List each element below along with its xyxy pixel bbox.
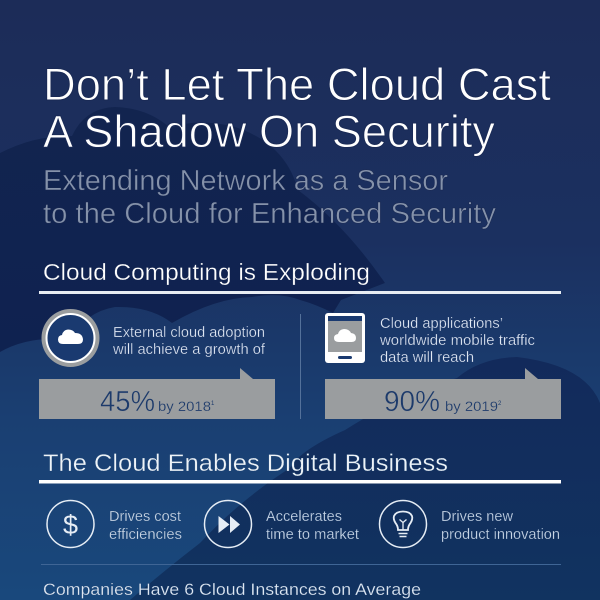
icon: fast forward — [204, 500, 252, 548]
subtitle: Extending Network as a Sensor — [43, 165, 449, 197]
benefit: cost — [47, 500, 182, 548]
cost text: efficiencies — [109, 527, 182, 543]
section rule — [39, 480, 561, 484]
icon: light bulb — [380, 500, 426, 548]
callout: 90%: 90% — [384, 386, 440, 418]
cost text: Drives cost — [109, 509, 181, 525]
time text: time to market — [266, 527, 359, 543]
traffic text: worldwide mobile traffic — [379, 333, 535, 349]
time text — [266, 509, 359, 543]
background cloud: bottom right — [130, 357, 600, 600]
background cloud: dark upper — [0, 107, 385, 352]
title: A Shadow On Security — [43, 106, 495, 157]
callout: 45%: by 2018 — [158, 398, 211, 414]
icon: tablet with cloud — [325, 313, 365, 363]
callout: 90%: by 2019 — [445, 398, 498, 414]
divider — [300, 314, 301, 419]
innovation text — [441, 509, 560, 543]
section heading: instances: Companies Have 6 Cloud Instances on Average — [43, 580, 421, 599]
title: Don’t Let The Cloud Cast — [43, 59, 551, 110]
adoption text: will achieve a growth of — [112, 342, 266, 358]
panel: mobile traffic — [325, 313, 561, 419]
panel: external cloud adoption — [39, 309, 275, 419]
cost text — [109, 509, 182, 543]
callout: 45% — [39, 368, 275, 419]
callout: 45%: 45% — [100, 386, 155, 418]
callout: 45%: 1 — [211, 401, 215, 407]
traffic text: data will reach — [380, 350, 474, 366]
traffic text — [379, 316, 535, 366]
callout: 90% — [325, 368, 561, 419]
time text: Accelerates — [266, 509, 342, 525]
section heading: digital business: The Cloud Enables Digital Business — [43, 450, 448, 477]
adoption text: External cloud adoption — [113, 325, 265, 341]
section rule thin — [41, 564, 561, 565]
benefit: time — [204, 500, 359, 548]
icon: dollar: $ — [63, 510, 78, 540]
section heading: cloud computing: Cloud Computing is Exploding — [43, 259, 370, 285]
icon: cloud badge — [42, 309, 100, 367]
title — [43, 59, 551, 157]
subtitle — [43, 165, 497, 230]
innovation text: Drives new — [441, 509, 514, 525]
callout: 90%: 2 — [498, 401, 502, 407]
traffic text: Cloud applications’ — [380, 316, 503, 332]
adoption text — [112, 325, 266, 358]
subtitle: to the Cloud for Enhanced Security — [43, 198, 497, 230]
innovation text: product innovation — [441, 527, 560, 543]
section rule — [39, 291, 561, 294]
benefit: innovation — [380, 500, 560, 548]
